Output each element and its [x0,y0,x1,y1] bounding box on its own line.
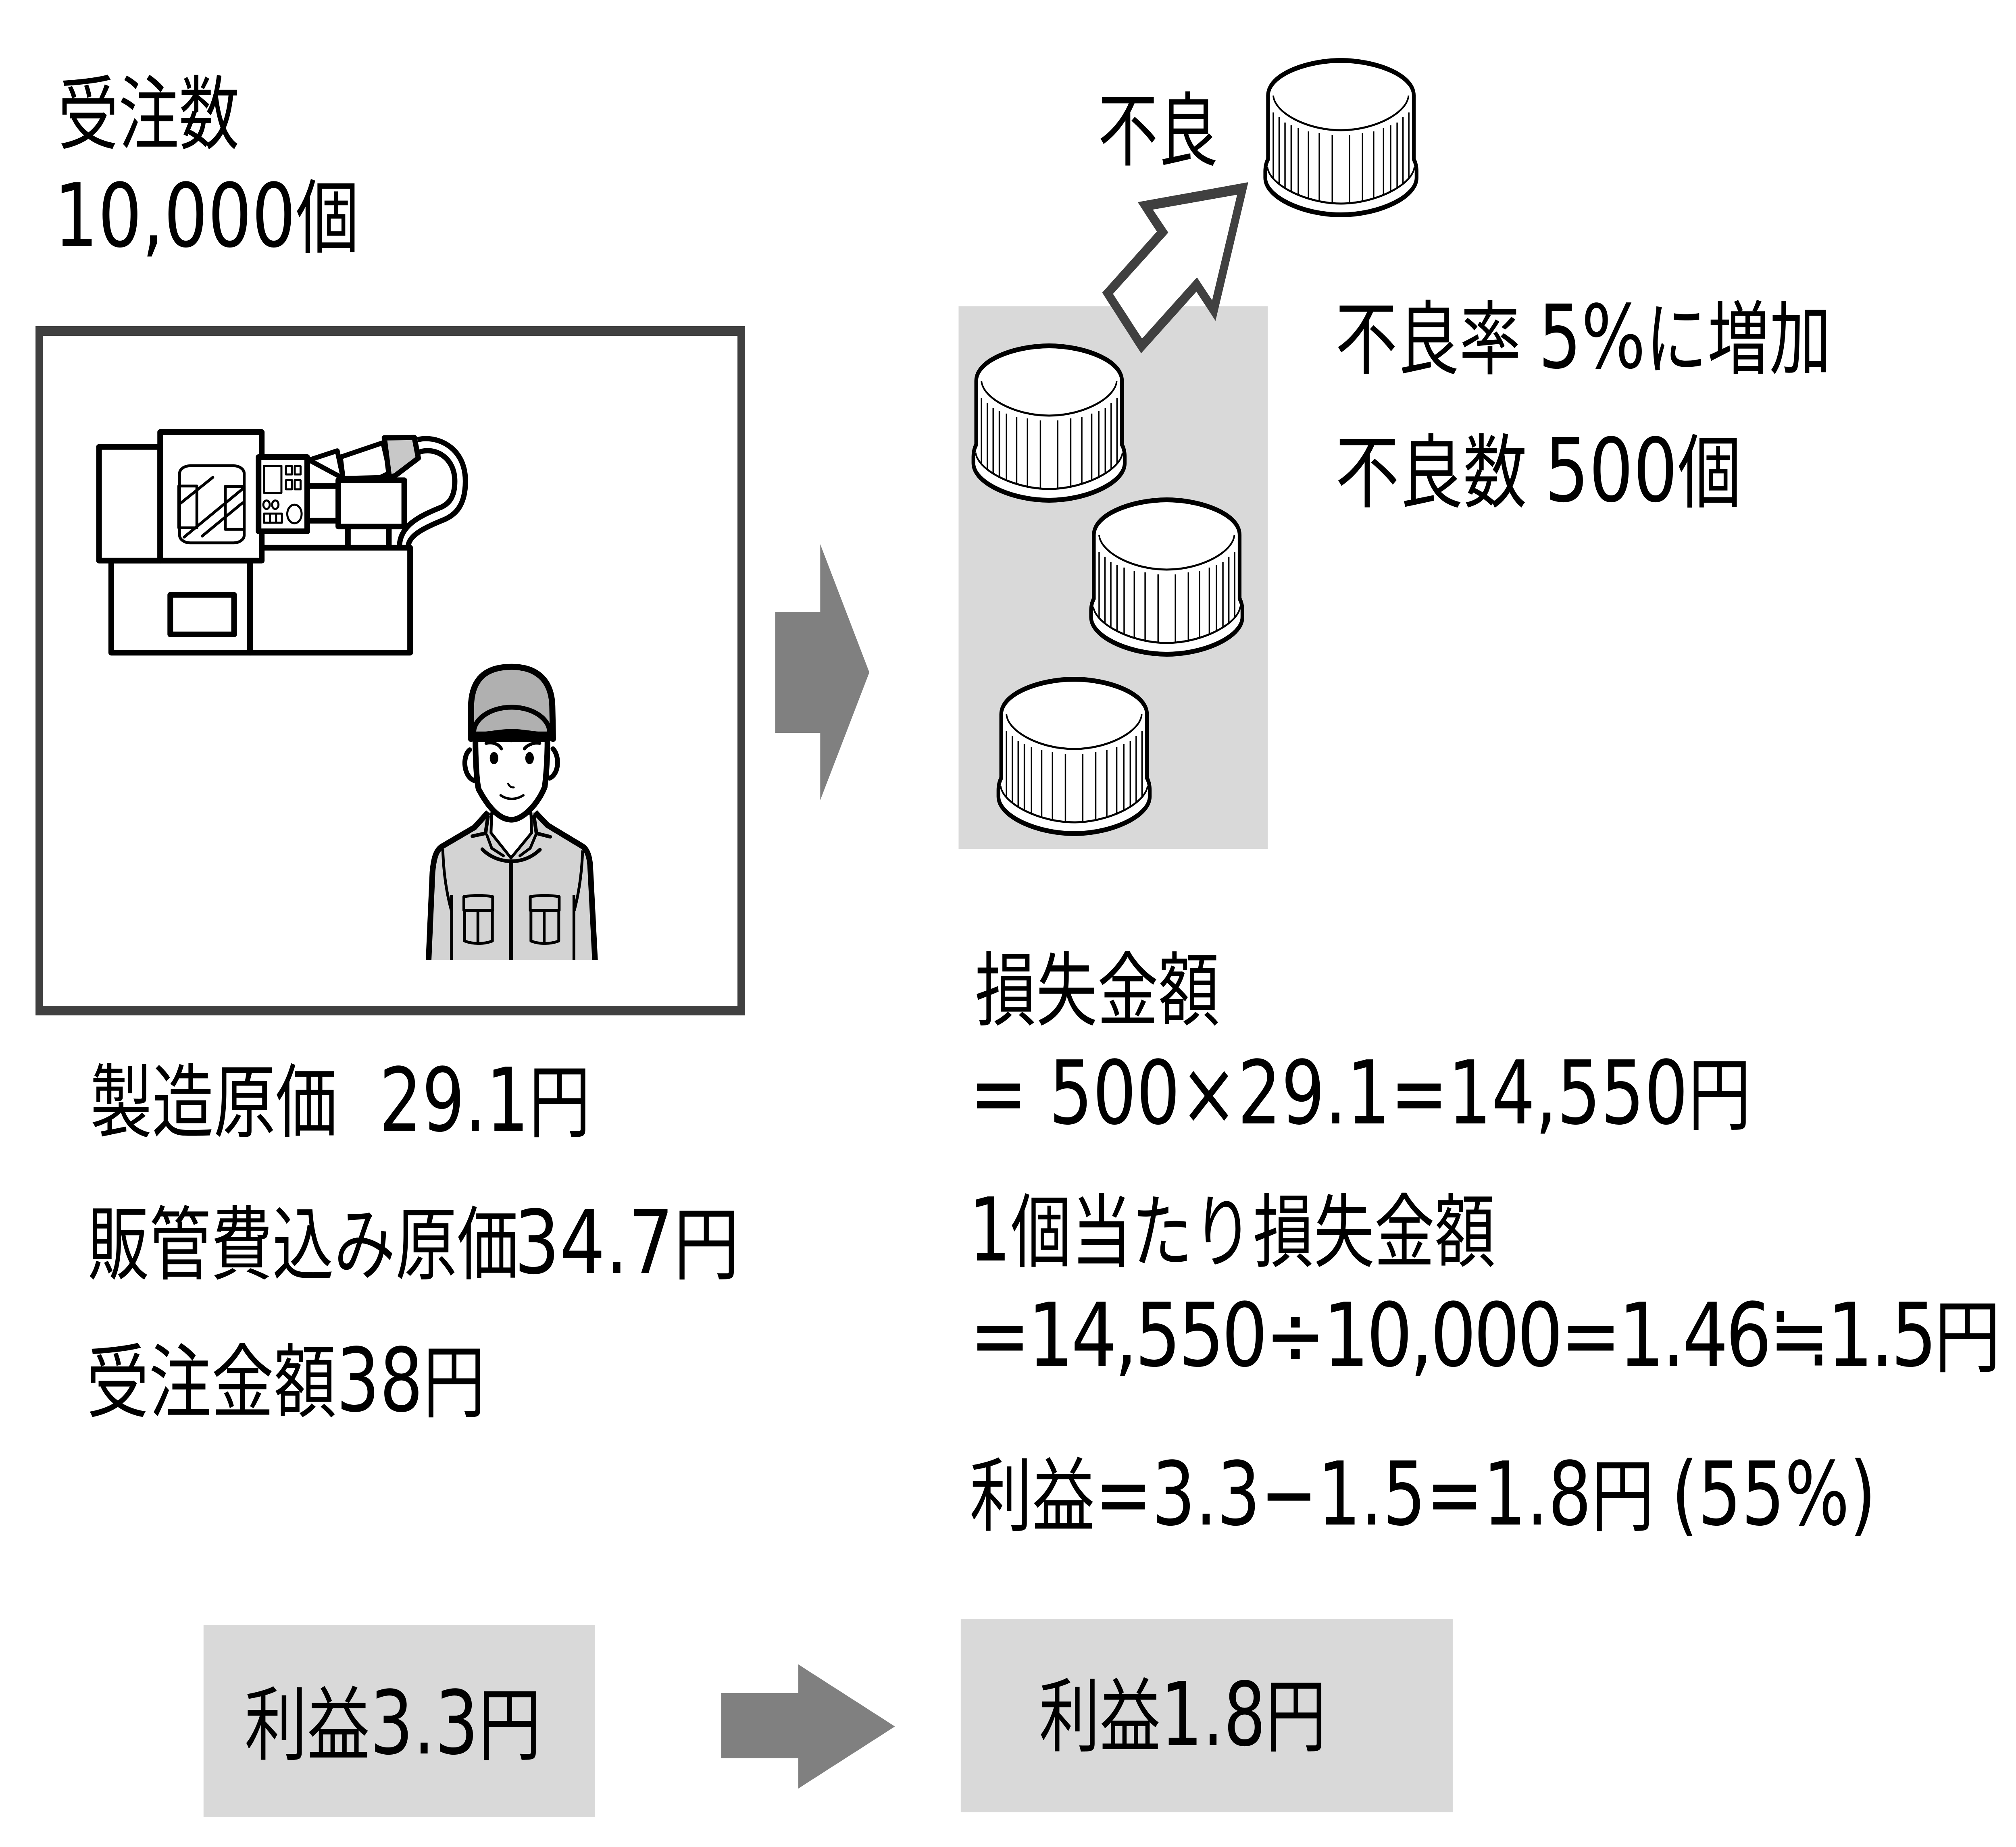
text: cost figures: 29.1円 [379,1049,590,1152]
text: loss calculation: 損失金額 [975,946,1220,1036]
icon: defective cap [1265,60,1416,215]
heading: order quantity: 10,000個 [54,165,359,267]
text: cost figures: 34.7円 [514,1192,739,1294]
text: defect rate and count [1335,286,1831,522]
text: cost figures: 製造原価 [90,1058,337,1148]
panel: factory frame [39,331,741,1011]
text: loss calculation: =14,550÷10,000=1.46≒1.5 円 [970,1284,1998,1387]
arrow: process to defects [775,544,869,800]
box: profit before: 利益3.3円 [245,1672,541,1774]
panel: molded caps on gray [958,306,1268,849]
icon: factory worker [429,667,595,960]
label: defect: 不良 [1098,86,1218,177]
text: defect rate and count: 不良率 5%に増加 [1335,286,1831,389]
icon: cap 2 [1091,500,1242,654]
text: cost figures [86,1049,739,1432]
text: cost figures: 販管費込み原価 [88,1200,519,1290]
text: defect rate and count: 不良数 500個 [1335,420,1741,522]
heading: order quantity [54,70,359,267]
icon: cap 1 [973,346,1125,500]
arrow: outlined defect arrow [1102,182,1248,353]
box: profit after: 利益1.8円 [1039,1664,1327,1766]
text: loss calculation: = 500×29.1=14,550円 [970,1042,1751,1144]
arrow: profit change [721,1664,895,1789]
text: cost figures: 受注金額38円 [86,1329,485,1432]
icon: cap 3 [998,679,1150,834]
box: profit after [961,1619,1453,1812]
text: loss calculation: 1個当たり損失金額 [969,1179,1495,1281]
heading: order quantity: 受注数 [58,70,240,160]
text: loss calculation [969,946,1998,1545]
text: loss calculation: 利益=3.3−1.5=1.8円 (55%) [970,1443,1876,1545]
box: profit before [204,1625,595,1817]
icon: injection molding machine [99,432,465,653]
